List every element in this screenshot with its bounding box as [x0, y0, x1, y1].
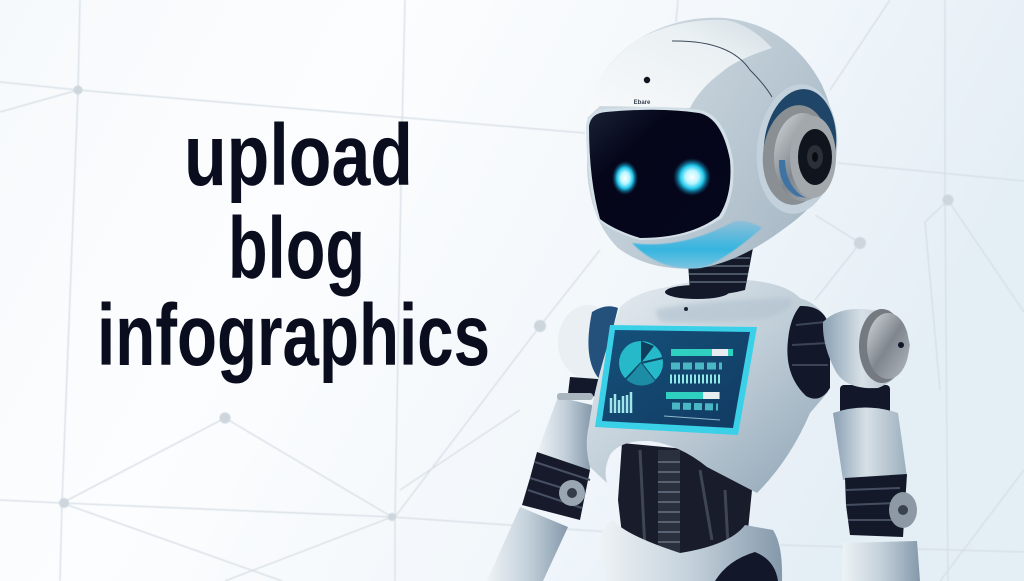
right forearm	[842, 541, 920, 581]
title	[97, 107, 490, 384]
chest highlight	[655, 298, 792, 323]
visor	[586, 107, 734, 240]
left upper arm	[537, 397, 592, 470]
right eye	[673, 158, 711, 196]
network nodes	[59, 86, 954, 521]
ear camera	[750, 80, 844, 218]
left eye	[612, 161, 638, 195]
left elbow joint	[522, 452, 590, 520]
hip section	[600, 520, 782, 581]
left forearm	[487, 507, 568, 581]
neck	[687, 248, 753, 295]
forehead label: Ebare	[634, 100, 651, 106]
right elbow joint	[845, 474, 917, 537]
pie chart	[619, 341, 663, 386]
head	[586, 18, 844, 269]
title: infographics	[97, 287, 490, 384]
forehead sensor	[644, 77, 650, 83]
right shoulder	[823, 309, 910, 388]
inner mechanism	[618, 443, 752, 560]
head seam	[672, 41, 772, 97]
right shoulder joint	[787, 306, 830, 399]
head highlight	[587, 20, 772, 118]
right upper arm	[833, 385, 907, 480]
chin glow	[632, 221, 762, 268]
torso screen	[595, 325, 757, 435]
neck opening	[665, 285, 729, 299]
bar charts	[611, 349, 733, 420]
title: upload	[184, 107, 413, 204]
torso	[587, 280, 830, 493]
robot	[487, 18, 920, 581]
left shoulder	[557, 305, 618, 400]
title: blog	[228, 200, 365, 297]
